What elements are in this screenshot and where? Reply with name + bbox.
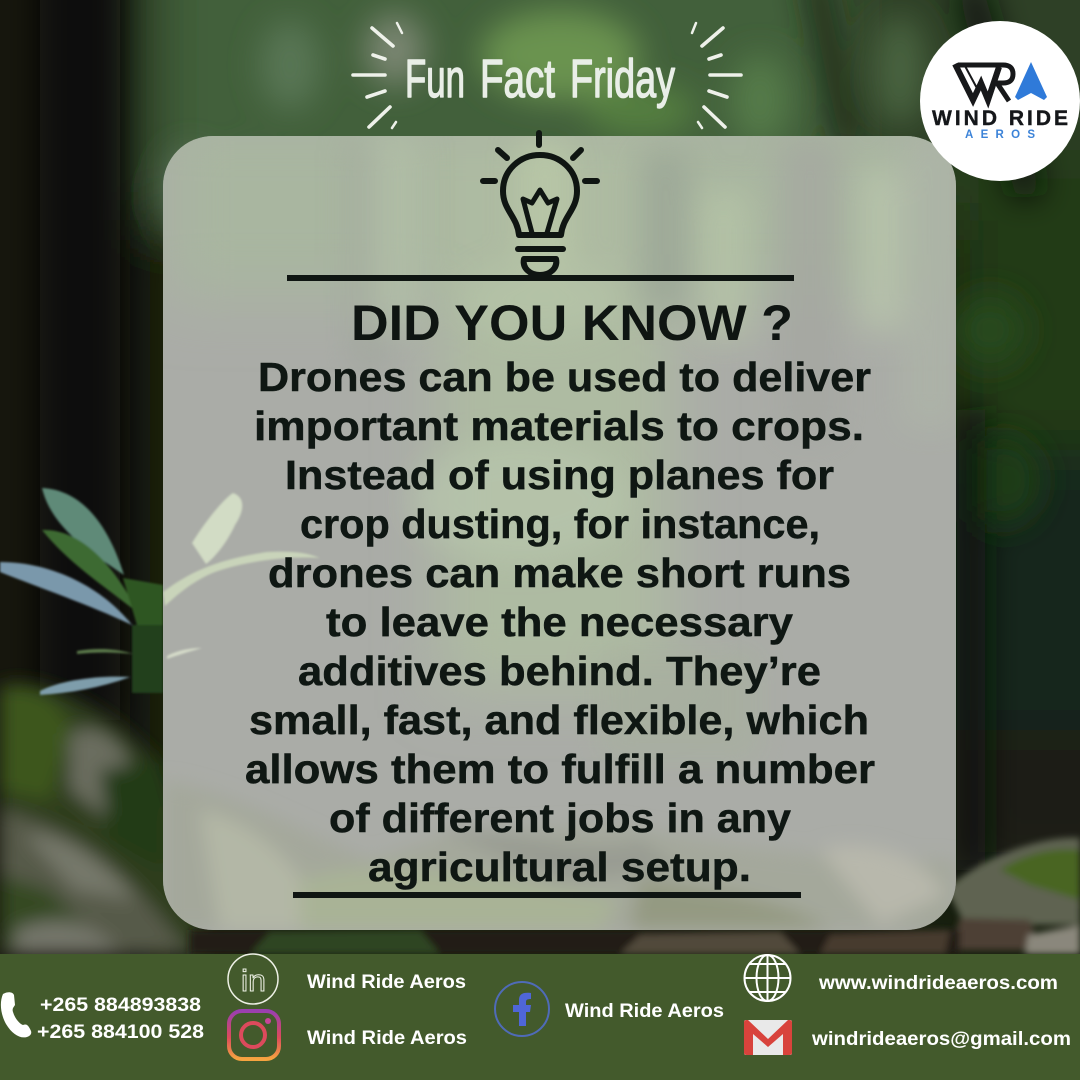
body text block: allows them to fulfill a number (245, 746, 875, 792)
bottom divider line (293, 892, 801, 898)
footer bar (0, 954, 1080, 1080)
phone numbers: +265 884893838 (40, 995, 201, 1016)
logo mark: WR (955, 64, 1013, 101)
icon: gmail (744, 1020, 792, 1055)
logo mark: blue arrow (1015, 62, 1047, 100)
facebook label: Wind Ride Aeros (565, 1001, 724, 1022)
icon: phone (1, 992, 31, 1037)
body text block: of different jobs in any (329, 795, 791, 841)
linkedin label: Wind Ride Aeros (307, 972, 466, 993)
right sparkle rays (692, 23, 741, 128)
body text block: crop dusting, for instance, (300, 501, 820, 547)
body text block: important materials to crops. (254, 403, 864, 449)
logo sub wordmark: AEROS (965, 129, 1035, 141)
logo badge (920, 21, 1080, 181)
title: Fun Fact Friday: Fact (480, 49, 555, 109)
body text block (245, 354, 875, 890)
instagram label: Wind Ride Aeros (307, 1028, 467, 1049)
body text block: to leave the necessary (326, 599, 793, 645)
email address: windrideaeros@gmail.com (811, 1029, 1071, 1050)
mossy rocks (0, 683, 210, 954)
website url: www.windrideaeros.com (818, 973, 1058, 994)
heading: did you know: DID YOU KNOW ? (351, 295, 793, 351)
icon: linkedin: in (241, 963, 266, 998)
plant with leaves (0, 488, 163, 695)
title: Fun Fact Friday: Friday (570, 49, 675, 109)
top divider line (287, 275, 794, 281)
body text block: Instead of using planes for (285, 452, 834, 498)
body text block: additives behind. They’re (298, 648, 821, 694)
body text block: Drones can be used to deliver (258, 354, 871, 400)
icon: instagram (229, 1011, 279, 1059)
title: Fun Fact Friday: Fun (405, 49, 465, 109)
body text block: drones can make short runs (268, 550, 851, 596)
icon: light bulb (483, 133, 597, 275)
left sparkle rays (353, 23, 402, 128)
phone numbers (37, 995, 204, 1043)
body text block: agricultural setup. (368, 844, 751, 890)
body text block: small, fast, and flexible, which (249, 697, 869, 743)
title: Fun Fact Friday (405, 49, 675, 109)
translucent panel (163, 110, 960, 930)
plant seen through panel (163, 493, 320, 659)
icon: globe (744, 955, 790, 1001)
phone numbers: +265 884100 528 (37, 1022, 204, 1043)
logo wordmark: WIND RIDE (932, 107, 1068, 130)
icon: linkedin (228, 954, 278, 1004)
icon: facebook (495, 982, 549, 1036)
